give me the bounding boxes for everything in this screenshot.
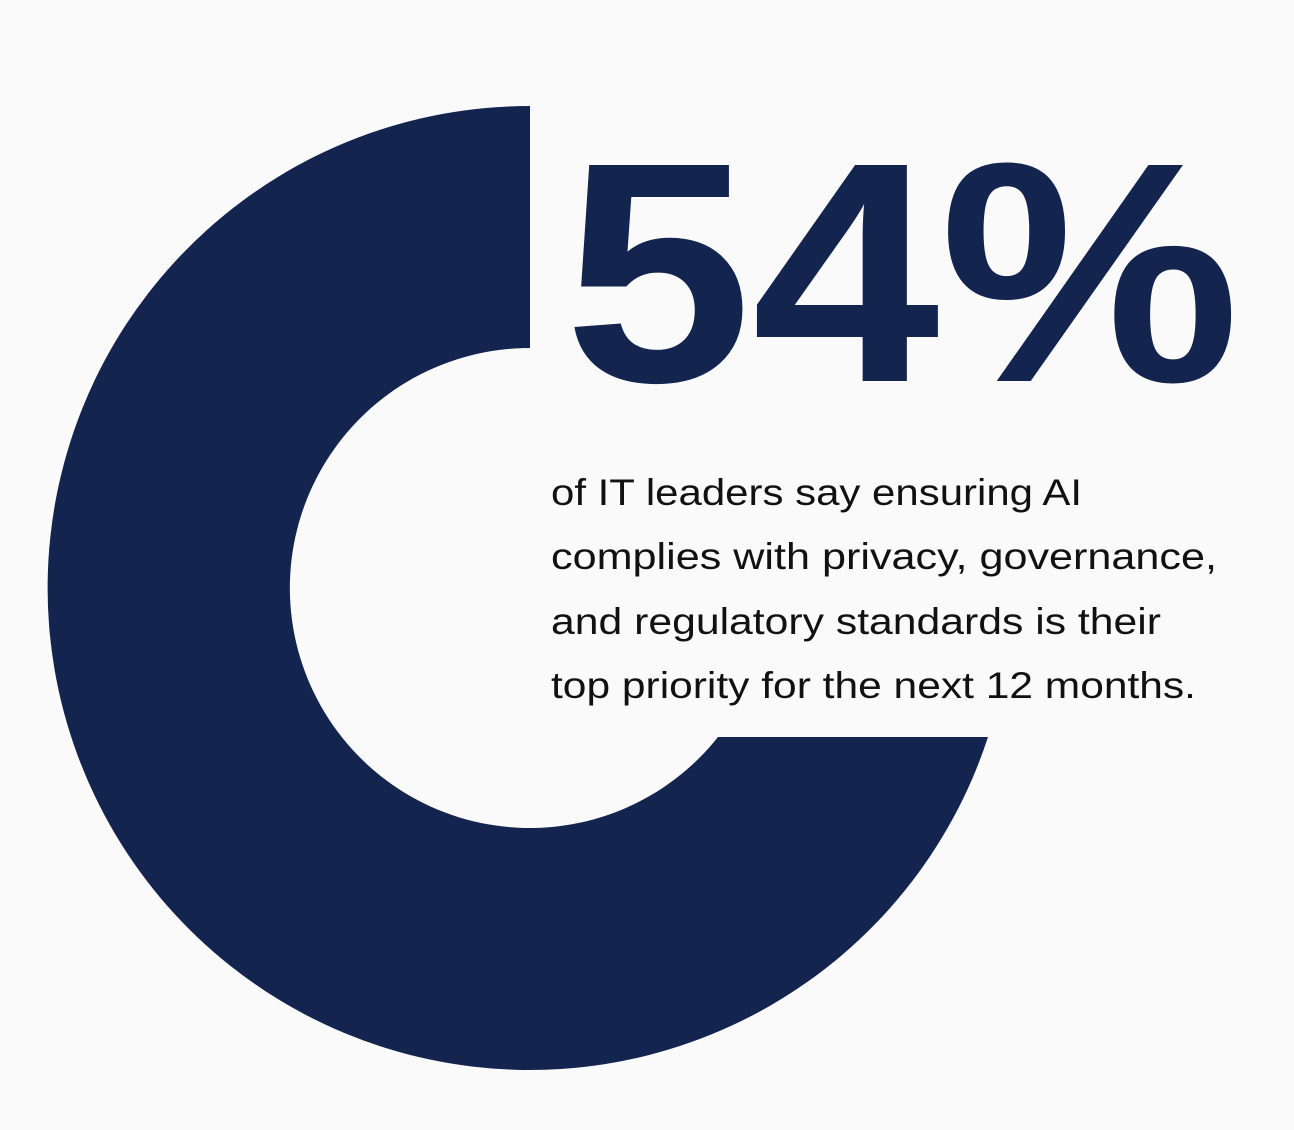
text block: description: and regulatory standards is their xyxy=(551,601,1161,642)
text block: description xyxy=(551,472,1217,706)
big stat: 54%: 54% xyxy=(564,97,1240,448)
text block: description: complies with privacy, governance, xyxy=(551,536,1217,577)
chart: donut 54% xyxy=(48,106,988,1070)
text block: description: of IT leaders say ensuring AI xyxy=(551,472,1082,513)
text block: description: top priority for the next 12 months. xyxy=(551,665,1196,706)
